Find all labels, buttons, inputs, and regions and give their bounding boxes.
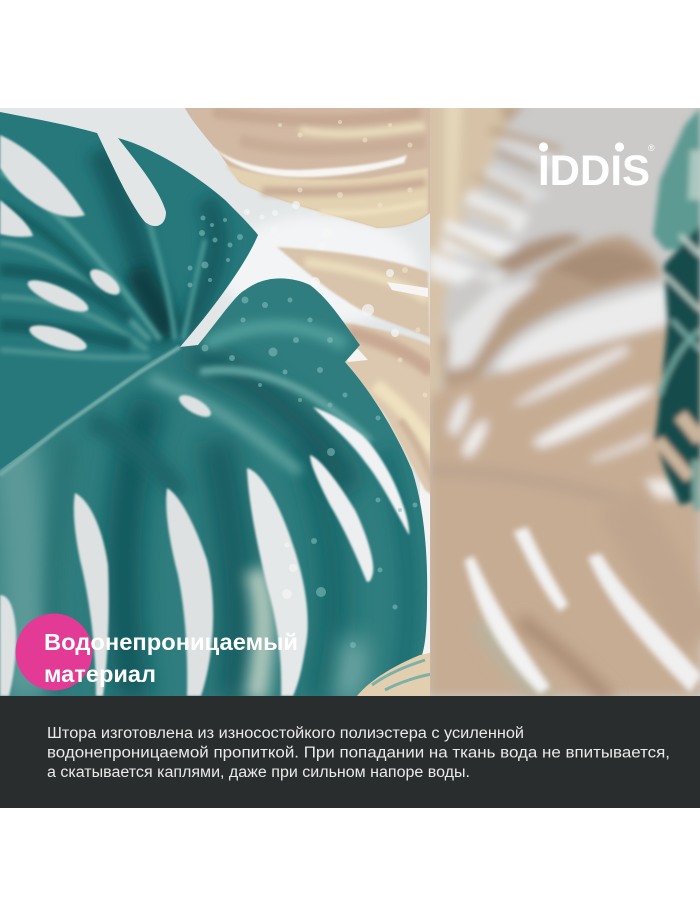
teal leaf upper <box>0 108 270 478</box>
infographic canvas <box>0 108 700 808</box>
leaf midrib <box>0 347 180 475</box>
body text: водонепроницаемой пропиткой. При попадании на ткань вода не впитывается, <box>47 744 670 762</box>
water droplets on teal <box>188 216 418 648</box>
heading: материал <box>44 661 156 687</box>
teal leaf lower <box>0 270 440 700</box>
heading: Водонепроницаемый <box>44 629 298 655</box>
logo: IDDIS: IDDIS <box>538 147 650 195</box>
panel: fabric photo <box>0 100 700 700</box>
leaf cut-outs <box>0 135 409 696</box>
pink circle <box>16 614 92 690</box>
water droplets on fabric <box>244 201 399 599</box>
beige leaf tip bottom <box>357 652 430 696</box>
panel: description band <box>0 696 700 808</box>
logo: IDDIS: ® <box>648 143 655 153</box>
body text: Штора изготовлена из износостойкого полиэстера с усиленной <box>47 725 524 742</box>
heading <box>44 629 298 687</box>
body text: а скатывается каплями, даже при сильном напоре воды. <box>47 764 470 781</box>
body text <box>47 725 670 781</box>
beige monstera leaf <box>185 108 438 500</box>
water droplets on beige <box>278 120 428 398</box>
panel: blurred curtain fold <box>420 100 700 700</box>
